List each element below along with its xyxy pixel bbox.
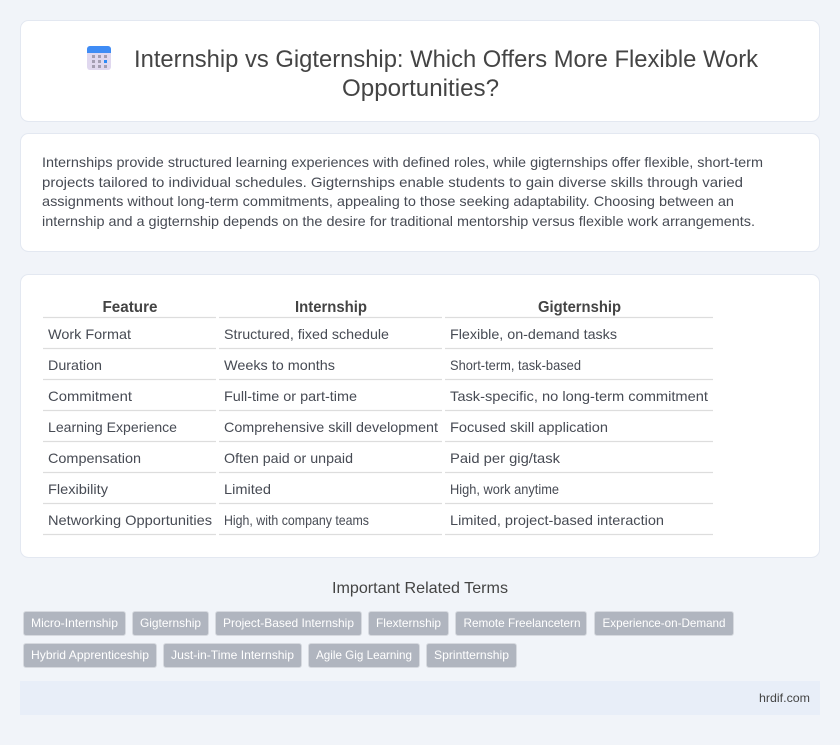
- row: compensation: Compensation: [48, 450, 141, 466]
- panel: description: [20, 134, 820, 252]
- tag: Gigternship: Gigternship: [140, 616, 201, 630]
- tag: Sprintternship: Sprintternship: [434, 648, 509, 662]
- row: commitment: Full-time or part-time: [224, 388, 357, 404]
- tag: Agile Gig Learning: [308, 644, 420, 668]
- row: learning experience: Focused skill application: [450, 419, 608, 435]
- tag: Gigternship: [132, 612, 208, 636]
- panel: header: [20, 20, 820, 122]
- row: work format: Work Format: [48, 326, 131, 342]
- tag: Project-Based Internship: [216, 612, 362, 636]
- tags: related terms: [24, 612, 734, 668]
- table header: Internship: [295, 299, 367, 316]
- table header: Feature: [102, 299, 158, 316]
- row: duration: Duration: [48, 357, 102, 373]
- row: networking opportunities: High, with company teams: [224, 512, 369, 528]
- row: flexibility: Flexibility: [48, 481, 108, 497]
- row: learning experience: Comprehensive skill development: [224, 419, 438, 435]
- row: compensation: Paid per gig/task: [450, 450, 561, 466]
- row: work format: [48, 326, 617, 342]
- row: flexibility: High, work anytime: [450, 481, 559, 497]
- row: commitment: [48, 388, 708, 404]
- tag: Experience-on-Demand: Experience-on-Demand: [602, 616, 726, 630]
- text block: description: assignments without long-term commitments, appealing to those seeking adaptability. Choosing between an: [42, 193, 734, 209]
- tag: Micro-Internship: Micro-Internship: [31, 616, 118, 630]
- table rules: [43, 318, 713, 534]
- tag: Sprintternship: [426, 644, 516, 668]
- row: duration: Short-term, task-based: [450, 357, 581, 373]
- table header: Gigternship: [538, 299, 621, 316]
- row: learning experience: [48, 419, 608, 435]
- tag: Micro-Internship: [24, 612, 126, 636]
- row: compensation: Often paid or unpaid: [224, 450, 353, 466]
- tag: Remote Freelancetern: [456, 612, 586, 636]
- text block: description: [42, 154, 763, 229]
- row: work format: Structured, fixed schedule: [224, 326, 389, 342]
- tag: Agile Gig Learning: Agile Gig Learning: [316, 648, 412, 662]
- footer: [20, 681, 820, 715]
- panel: comparison table: [20, 274, 820, 558]
- heading: related terms: Important Related Terms: [332, 580, 508, 597]
- title: [134, 46, 759, 102]
- tag: Just-in-Time Internship: Just-in-Time Internship: [171, 648, 294, 662]
- footer text: hrdif.com: [759, 691, 810, 705]
- tag: Just-in-Time Internship: [164, 644, 302, 668]
- title: Opportunities?: [342, 75, 499, 102]
- row: networking opportunities: Limited, project-based interaction: [450, 512, 664, 528]
- row: compensation: [48, 450, 561, 466]
- row: flexibility: Limited: [224, 481, 271, 497]
- tag: Experience-on-Demand: [594, 612, 734, 636]
- text block: description: Internships provide structured learning experiences with defined roles, while gigternships offer flexible, short-term: [42, 154, 763, 170]
- text block: description: projects tailored to individual schedules. Gigternships enable students to gain diverse skills through varied: [42, 174, 743, 190]
- icon: calendar: [87, 46, 111, 70]
- tag: Remote Freelancetern: Remote Freelancetern: [464, 616, 580, 630]
- table header: [102, 299, 621, 316]
- row: learning experience: Learning Experience: [48, 419, 177, 435]
- row: duration: Weeks to months: [224, 357, 335, 373]
- row: work format: Flexible, on-demand tasks: [450, 326, 617, 342]
- row: commitment: Task-specific, no long-term commitment: [450, 388, 708, 404]
- row: networking opportunities: [48, 512, 664, 528]
- tag: Flexternship: [368, 612, 448, 636]
- tag: Flexternship: Flexternship: [376, 616, 441, 630]
- row: networking opportunities: Networking Opportunities: [48, 512, 212, 528]
- text block: description: internship and a gigternship depends on the desire for traditional mentorship versus flexible work arrangements.: [42, 213, 755, 229]
- tag: Project-Based Internship: Project-Based Internship: [223, 616, 354, 630]
- row: duration: [48, 357, 581, 373]
- title: Internship vs Gigternship: Which Offers More Flexible Work: [134, 46, 759, 73]
- row: commitment: Commitment: [48, 388, 132, 404]
- row: flexibility: [48, 481, 559, 497]
- tag: Hybrid Apprenticeship: Hybrid Apprenticeship: [31, 648, 149, 662]
- tag: Hybrid Apprenticeship: [24, 644, 156, 668]
